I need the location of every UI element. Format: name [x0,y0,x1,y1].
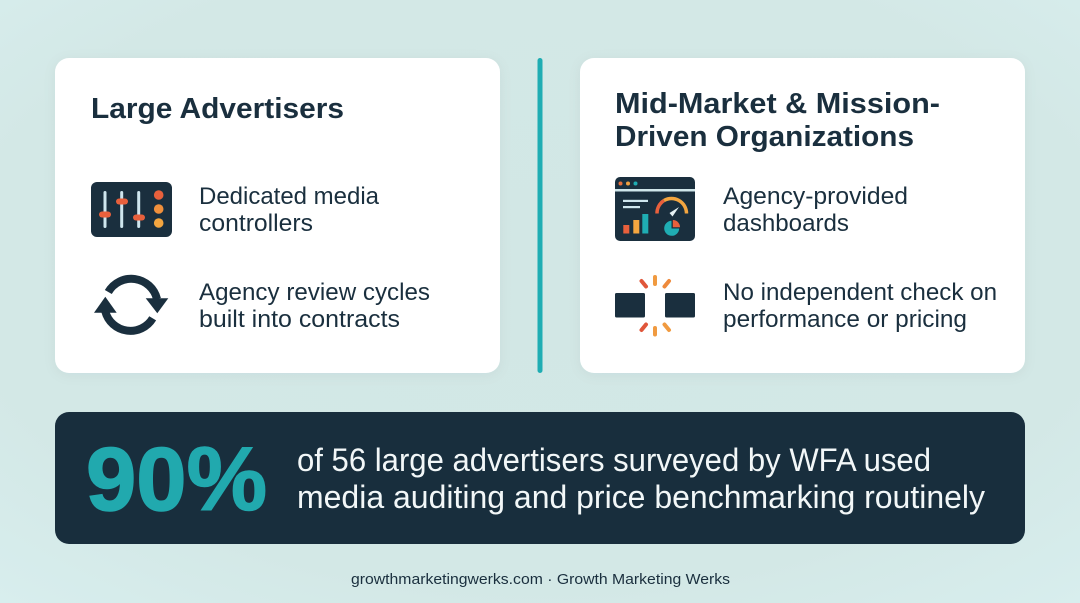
icon: dashboard [615,177,695,241]
heading: large advertisers: Large Advertisers [91,93,344,125]
text: no independent check: No independent check on [723,279,997,306]
text: agency-provided dashboards: dashboards [723,210,849,237]
banner: 90 percent statistic [55,412,1025,544]
icon: review cycle arrows [94,279,168,331]
text: survey statement [297,442,985,515]
footer: source credit: growthmarketingwerks.com · Growth Marketing Werks [351,572,730,588]
panel: mid-market and mission-driven organizations [580,58,1025,373]
text: no independent check [723,279,997,333]
text: survey statement: of 56 large advertisers surveyed by WFA used [297,442,931,478]
icon: media control sliders [91,182,172,237]
heading: mid-market and mission-driven organizations [615,88,940,153]
text: agency-provided dashboards: Agency-provided [723,183,908,210]
text: agency review cycles: Agency review cycles [199,279,430,306]
big number: 90%: 90% [86,430,267,530]
panel: large advertisers [55,58,500,373]
heading: mid-market and mission-driven organizations: Mid-Market & Mission- [615,88,940,120]
text: agency review cycles: built into contracts [199,306,400,333]
text: dedicated media controllers: controllers [199,210,313,237]
heading: mid-market and mission-driven organizations: Driven Organizations [615,121,914,153]
icon: disconnected blocks with sparks [615,277,695,334]
text: dedicated media controllers [199,183,380,237]
text: no independent check: performance or pricing [723,306,967,333]
text: agency review cycles [199,279,430,333]
text: dedicated media controllers: Dedicated media [199,183,380,210]
text: survey statement: media auditing and price benchmarking routinely [297,479,985,515]
text: agency-provided dashboards [723,183,908,237]
divider [538,58,542,373]
